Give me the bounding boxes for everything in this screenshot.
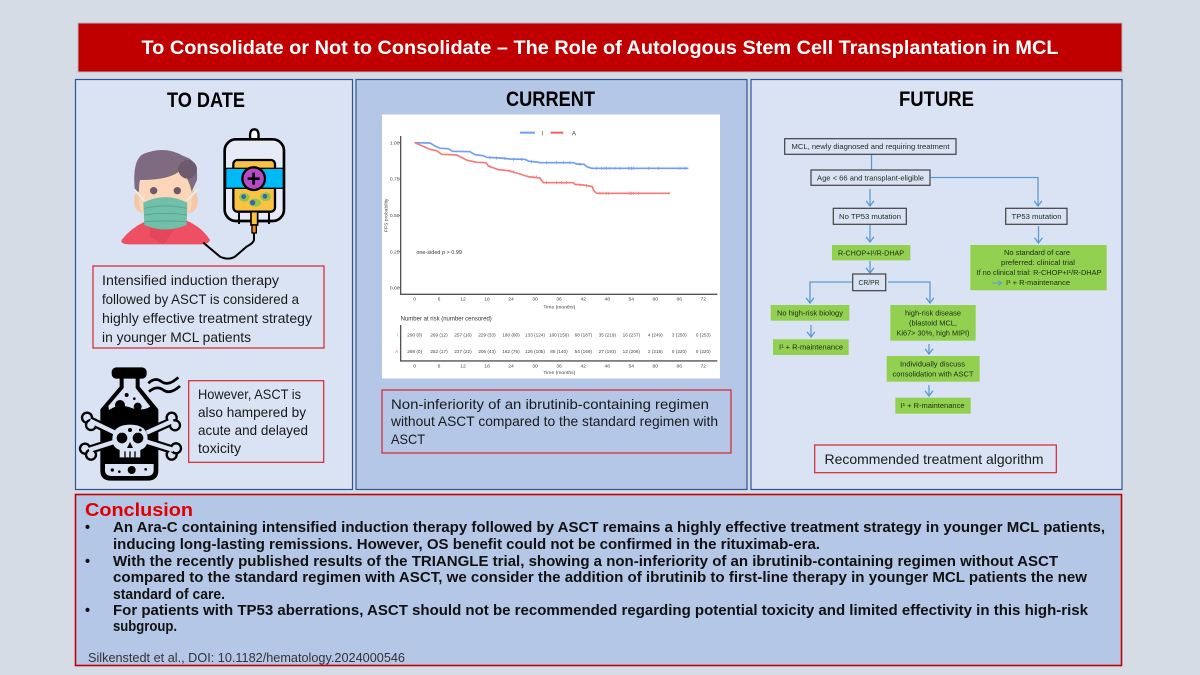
risk table: 257 (16): [454, 333, 472, 338]
y axis labels: 1.00: [390, 140, 400, 146]
x axis labels: 6: [438, 297, 441, 303]
icon: masked patient with IV bag: [121, 129, 284, 259]
panel: conclusion: [76, 494, 1122, 666]
risk table: 206 (43): [478, 349, 496, 354]
y axis labels: 0.75: [390, 177, 400, 183]
risk table: 24: [508, 364, 514, 370]
legend: [520, 130, 577, 137]
risk table: Time (months): [543, 370, 576, 376]
panel: future: [751, 80, 1122, 490]
risk table: 36: [556, 364, 562, 370]
y axis labels: 0.25: [390, 249, 400, 255]
risk table: 30: [532, 364, 538, 370]
box: TP53 treatment: If no clinical trial: R-CHOP+I¹/R-DHAP: [976, 268, 1102, 277]
x axis labels: [413, 297, 706, 310]
box: CR/PR: CR/PR: [858, 278, 880, 287]
box: high-risk disease: [890, 305, 976, 341]
risk table: 162 (76): [502, 349, 520, 354]
box: no high-risk biology: [771, 305, 849, 321]
curve: arm I: [415, 143, 688, 170]
risk table: 72: [701, 364, 706, 370]
x axis labels: 0: [413, 297, 416, 303]
citation: Silkenstedt et al., DOI: 10.1182/hematology.2024000546: [88, 650, 405, 665]
y axis labels: FFS probability: [384, 198, 390, 232]
risk table: 2 (218): [648, 349, 663, 354]
risk table: 133 (124): [525, 333, 545, 338]
box: individually discuss: Individually discuss: [900, 359, 965, 368]
box: high-risk disease: (blastoid MCL,: [909, 318, 957, 328]
box: TP53 treatment: [970, 245, 1107, 290]
icon: poison bottle with skull: [80, 367, 181, 481]
bullet: Ara-C induction: [85, 520, 1105, 553]
p value: one-sided p > 0.99: [416, 250, 462, 256]
risk table: 12 (208): [623, 349, 640, 354]
box: maintenance left: [773, 339, 849, 355]
box: TP53 mutation: TP53 mutation: [1012, 212, 1062, 221]
risk table: 0: [413, 364, 416, 370]
box: TP53 mutation: [1006, 208, 1067, 224]
bullet: TRIANGLE trial: With the recently published results of the TRIANGLE trial, showing a non-inferiority of an ibrutinib-containing regimen without ASCT: [113, 554, 1058, 570]
bullet: Ara-C induction: •: [85, 520, 90, 536]
x axis labels: 24: [508, 297, 514, 303]
x axis labels: 42: [581, 297, 586, 303]
risk table: 0 (220): [672, 349, 687, 354]
risk table: 54 (169): [575, 349, 592, 354]
risk table: 180 (80): [502, 333, 520, 338]
callout: ASCT toxicity: acute and delayed: [198, 422, 308, 438]
risk table: 252 (17): [430, 349, 448, 354]
heading: conclusion: Conclusion: [85, 499, 193, 520]
risk table: 48: [605, 364, 610, 370]
legend: A: [572, 130, 577, 137]
risk table: 85 (140): [550, 349, 568, 354]
risk table: 42: [581, 364, 586, 370]
legend: I: [541, 130, 543, 137]
box: CR/PR: [853, 274, 886, 291]
callout: intensified induction: followed by ASCT is considered a: [102, 291, 299, 307]
box: age under 66: [811, 170, 930, 185]
flow arrows: [810, 154, 1038, 396]
box: high-risk disease: Ki67> 30%, high MIPI): [896, 328, 970, 338]
risk table: 237 (22): [454, 349, 472, 354]
y axis labels: 0.50: [390, 213, 400, 219]
box: MCL newly diagnosed: [785, 139, 956, 154]
bullet: TRIANGLE trial: •: [85, 554, 90, 570]
box: no TP53 mutation: No TP53 mutation: [839, 212, 901, 221]
box: high-risk disease: high-risk disease: [905, 308, 961, 318]
box: individually discuss: [887, 356, 980, 382]
box: TP53 treatment: I¹ + R-maintenance: [1006, 278, 1070, 287]
x axis labels: 60: [653, 297, 658, 303]
box: TP53 treatment: preferred: clinical trial: [1001, 258, 1075, 267]
heading: current: CURRENT: [506, 88, 595, 111]
risk table: 3 (250): [672, 333, 687, 338]
box: R-CHOP: [832, 245, 910, 260]
risk table: I: [397, 333, 398, 338]
box: R-CHOP: R-CHOP+I¹/R-DHAP: [838, 248, 904, 257]
chart: Kaplan-Meier FFS curve with risk table: [382, 114, 720, 378]
risk table: 60: [653, 364, 658, 370]
callout: non-inferiority: [382, 390, 731, 453]
risk table: 126 (105): [525, 349, 545, 354]
x axis labels: Time (months): [543, 304, 576, 310]
panel: current: [356, 80, 747, 490]
x axis labels: 30: [532, 297, 538, 303]
risk table: 18: [484, 364, 490, 370]
bullet: TP53 aberrations: [85, 603, 1089, 635]
risk table: A: [395, 349, 399, 354]
callout: ASCT toxicity: However, ASCT is: [198, 386, 301, 402]
box: MCL newly diagnosed: MCL, newly diagnosed and requiring treatment: [792, 142, 950, 151]
risk table: 288 (0): [407, 349, 422, 354]
risk table: 6: [438, 364, 441, 370]
box: no TP53 mutation: [833, 208, 906, 224]
heading: to date: TO DATE: [167, 89, 245, 112]
risk table: 68 (187): [575, 333, 592, 338]
x axis labels: 54: [629, 297, 634, 303]
callout: recommended treatment algorithm: [815, 445, 1056, 473]
risk table: 100 (156): [549, 333, 569, 338]
callout: intensified induction: [93, 266, 324, 348]
callout: intensified induction: Intensified induction therapy: [102, 272, 279, 288]
callout: ASCT toxicity: also hampered by: [198, 404, 306, 420]
box: no high-risk biology: No high-risk biology: [777, 308, 843, 318]
risk table: 269 (12): [430, 333, 448, 338]
y axis labels: 0.00: [390, 285, 400, 291]
box: individually discuss: consolidation with ASCT: [892, 369, 974, 378]
flowchart: treatment algorithm: [771, 139, 1107, 414]
title banner: To Consolidate or Not to Consolidate – The Role of Autologous Stem Cell Transplantation in MCL: [142, 37, 1059, 59]
bullet: TP53 aberrations: •: [85, 603, 90, 619]
bullet: TP53 aberrations: subgroup.: [113, 619, 177, 635]
box: TP53 treatment: No standard of care: [1004, 248, 1070, 257]
risk table: 35 (219): [599, 333, 616, 338]
risk table: 54: [629, 364, 634, 370]
heading: future: FUTURE: [899, 88, 974, 111]
bullet: TP53 aberrations: For patients with TP53 aberrations, ASCT should not be recommended regarding potential toxicity and limited effectivity in this high-risk: [113, 603, 1089, 619]
x axis labels: 48: [605, 297, 610, 303]
box: age under 66: Age < 66 and transplant-eligible: [817, 173, 924, 182]
risk table: 27 (193): [599, 349, 616, 354]
bullet: Ara-C induction: inducing long-lasting remissions. However, OS benefit could not be confirmed in the rituximab-era.: [113, 537, 820, 553]
box: maintenance right: I¹ + R-maintenance: [900, 401, 964, 410]
risk table: 0 (253): [696, 333, 711, 338]
callout: intensified induction: highly effective treatment strategy: [102, 310, 312, 326]
title banner: [78, 23, 1122, 72]
box: maintenance left: I¹ + R-maintenance: [779, 343, 843, 352]
x axis labels: 18: [484, 297, 490, 303]
panel: to date: [76, 80, 352, 490]
callout: non-inferiority: ASCT: [391, 431, 425, 447]
x axis labels: 66: [677, 297, 682, 303]
curve: arm A: [415, 143, 670, 195]
callout: recommended treatment algorithm: Recommended treatment algorithm: [824, 451, 1044, 467]
x axis labels: 12: [460, 297, 466, 303]
x axis labels: 72: [701, 297, 706, 303]
bullet: TRIANGLE trial: standard of care.: [113, 587, 225, 603]
x axis labels: 36: [556, 297, 562, 303]
risk table: 290 (0): [407, 333, 422, 338]
risk table: 229 (33): [478, 333, 496, 338]
callout: non-inferiority: without ASCT compared to the standard regimen with: [390, 413, 718, 429]
risk table: 12: [460, 364, 466, 370]
risk table: [395, 316, 717, 376]
y axis labels: [384, 140, 401, 291]
risk table: 0 (220): [696, 349, 711, 354]
risk table: 4 (249): [648, 333, 663, 338]
risk table: 16 (237): [623, 333, 640, 338]
callout: ASCT toxicity: [189, 381, 324, 462]
callout: intensified induction: in younger MCL patients: [102, 329, 251, 345]
box: maintenance right: [895, 398, 971, 414]
callout: non-inferiority: Non-inferiority of an ibrutinib-containing regimen: [391, 396, 709, 412]
bullet: TRIANGLE trial: [85, 554, 1088, 603]
risk table: Number at risk (number censored): [401, 316, 492, 322]
bullet: TRIANGLE trial: compared to the standard regimen with ASCT, we consider the addition of ibrutinib to first-line therapy in younger MCL patients the new: [113, 570, 1088, 586]
risk table: 66: [677, 364, 682, 370]
callout: ASCT toxicity: toxicity: [198, 440, 241, 456]
bullet: Ara-C induction: An Ara-C containing intensified induction therapy followed by ASCT remains a highly effective treatment strategy in younger MCL patients,: [113, 520, 1105, 536]
